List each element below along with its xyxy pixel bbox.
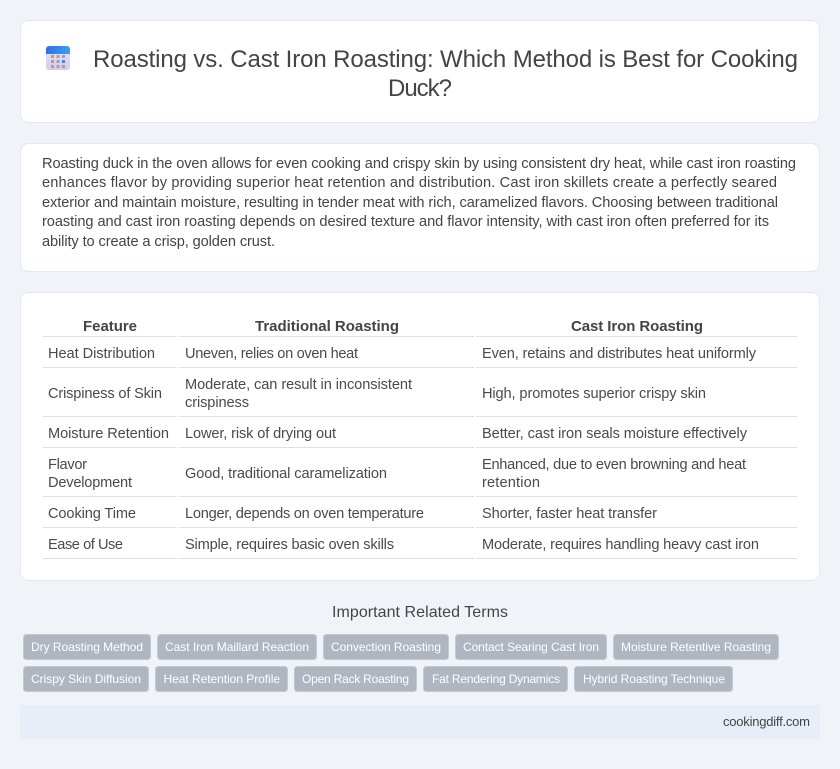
row: heat distribution: Even, retains and distributes heat uniformly [482, 346, 757, 362]
row: ease of use: Simple, requires basic oven skills [185, 537, 394, 553]
table header [83, 318, 703, 335]
row: heat distribution: Heat Distribution [48, 346, 155, 362]
row: crispiness of skin: crispiness [185, 395, 249, 411]
panel: title card [20, 20, 820, 122]
row: flavor development [48, 457, 746, 491]
panel: introduction text [20, 144, 820, 272]
title [93, 46, 798, 102]
tags: related terms: Heat Retention Profile [164, 672, 280, 686]
tags: related terms: Fat Rendering Dynamics [432, 672, 560, 686]
tags: related terms [24, 634, 778, 692]
row: ease of use [48, 537, 759, 553]
row: moisture retention: Lower, risk of drying out [185, 426, 336, 442]
row: ease of use: Moderate, requires handling heavy cast iron [482, 537, 759, 553]
row: crispiness of skin: Moderate, can result in inconsistent [185, 377, 412, 393]
row: cooking time: Longer, depends on oven temperature [185, 506, 424, 522]
row: moisture retention: Better, cast iron seals moisture effectively [482, 426, 748, 442]
footer: cookingdiff.com [723, 714, 810, 729]
row: crispiness of skin: Crispiness of Skin [48, 386, 162, 402]
tags: related terms: Hybrid Roasting Technique [583, 672, 725, 686]
row: moisture retention: Moisture Retention [48, 426, 169, 442]
table header: Cast Iron Roasting [571, 318, 703, 335]
panel: introduction text: exterior and maintain moisture, resulting in tender meat with rich, caramelized flavors. Choosing between traditional [42, 195, 778, 211]
heading: important related terms: Important Related Terms [332, 604, 508, 621]
panel: introduction text: Roasting duck in the oven allows for even cooking and crispy skin by using consistent dry heat, while cast iron roasting [42, 156, 796, 172]
tags: related terms: Crispy Skin Diffusion [31, 672, 141, 686]
row: heat distribution [48, 346, 757, 362]
row: cooking time [48, 506, 657, 522]
row: moisture retention [48, 426, 748, 442]
tags: related terms: Cast Iron Maillard Reaction [165, 640, 309, 654]
row: crispiness of skin [48, 377, 706, 411]
table header: Feature [83, 318, 137, 335]
panel: introduction text: ability to create a crisp, golden crust. [42, 234, 275, 250]
tags: related terms: Dry Roasting Method [31, 640, 143, 654]
panel: comparison table [20, 292, 820, 580]
row: flavor development: Enhanced, due to even browning and heat [482, 457, 746, 473]
footer [20, 705, 820, 739]
panel: introduction text: enhances flavor by providing superior heat retention and distribution. Cast iron skillets create a perfectly seared [42, 175, 777, 191]
row: ease of use: Ease of Use [48, 537, 123, 553]
tags: related terms: Moisture Retentive Roasting [621, 640, 771, 654]
title: Duck? [388, 75, 452, 102]
row: flavor development: retention [482, 475, 540, 491]
row: cooking time: Cooking Time [48, 506, 136, 522]
title: Roasting vs. Cast Iron Roasting: Which Method is Best for Cooking [93, 46, 798, 73]
panel: introduction text: roasting and cast iron roasting depends on desired texture and flavor intensity, with cast iron often preferred for its [42, 214, 769, 230]
icon: calendar [46, 46, 70, 70]
row: flavor development: Flavor [48, 457, 87, 473]
tags: related terms: Open Rack Roasting [302, 672, 409, 686]
table header: Traditional Roasting [255, 318, 399, 335]
row: crispiness of skin: High, promotes superior crispy skin [482, 386, 706, 402]
row: flavor development: Development [48, 475, 132, 491]
tags: related terms: Convection Roasting [331, 640, 441, 654]
row: flavor development: Good, traditional caramelization [185, 466, 387, 482]
row: heat distribution: Uneven, relies on oven heat [185, 346, 358, 362]
tags: related terms: Contact Searing Cast Iron [463, 640, 599, 654]
row: cooking time: Shorter, faster heat transfer [482, 506, 657, 522]
